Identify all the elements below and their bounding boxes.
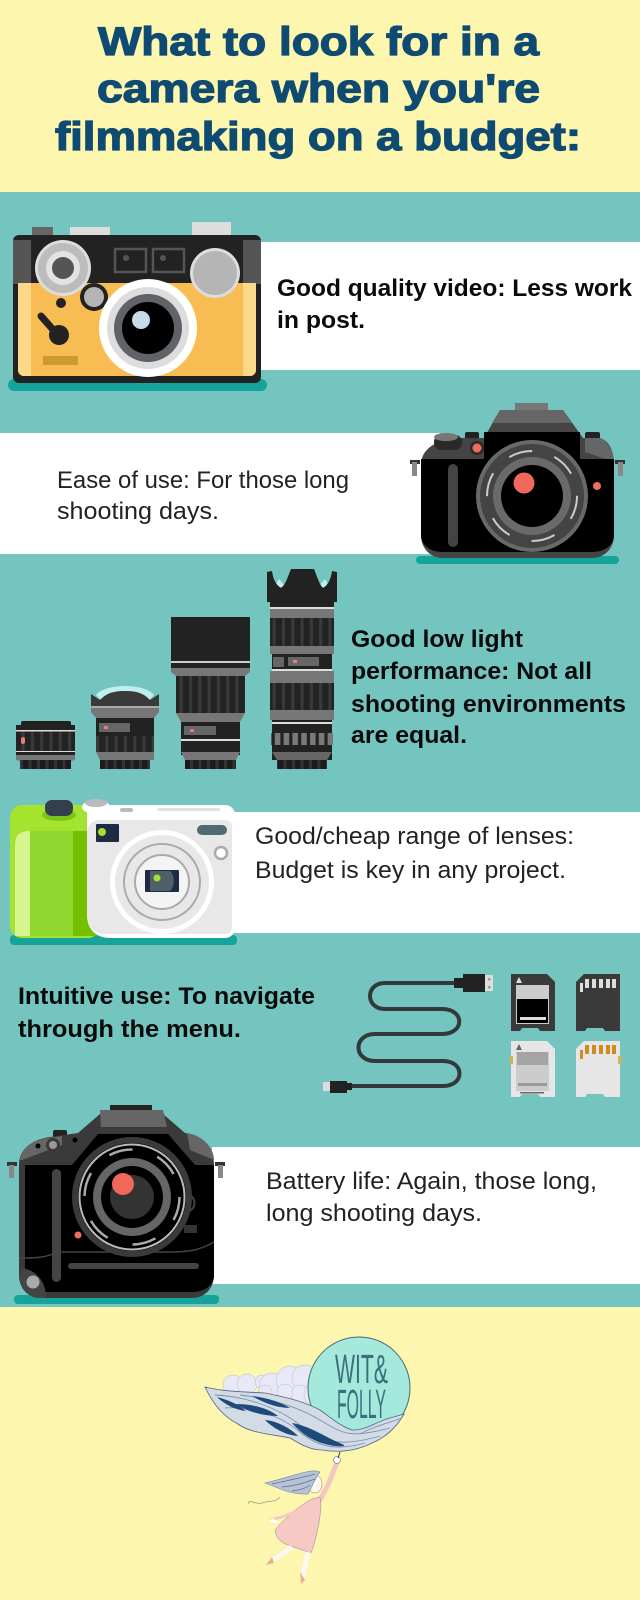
logo: wit and folly xyxy=(205,1337,410,1584)
icon: telephoto zoom lens xyxy=(267,569,337,769)
band: battery life xyxy=(212,1147,640,1284)
text: battery life: long shooting days. xyxy=(266,1200,482,1227)
logo circle with name xyxy=(308,1337,410,1439)
text: ease of use: Ease of use: For those long xyxy=(57,467,349,494)
icon: white and green compact camera xyxy=(10,799,237,945)
text: ease of use xyxy=(57,467,349,525)
text: intuitive use xyxy=(18,983,315,1043)
text: good low light performance xyxy=(351,626,626,749)
logo girl figure xyxy=(248,1452,340,1584)
text: battery life: Battery life: Again, those long, xyxy=(266,1168,597,1195)
text: range of lenses: Good/cheap range of lenses: xyxy=(255,823,574,850)
icon: USB cable xyxy=(323,974,493,1093)
band: range of lenses xyxy=(230,812,640,933)
text: ease of use: shooting days. xyxy=(57,498,219,525)
logo circle with name: WIT& xyxy=(335,1346,388,1392)
icon: hooded lens xyxy=(171,617,250,769)
text: good low light performance: are equal. xyxy=(351,722,467,749)
text: intuitive use: through the menu. xyxy=(18,1016,241,1043)
text: good quality video: Good quality video: Less work xyxy=(277,275,633,302)
logo clouds xyxy=(223,1365,332,1408)
text: battery life xyxy=(266,1168,597,1227)
icon: black DSLR camera xyxy=(410,403,625,564)
text: range of lenses xyxy=(255,823,574,884)
icon: lens set xyxy=(16,569,337,769)
text: range of lenses: Budget is key in any project. xyxy=(255,857,566,884)
text: good low light performance: shooting environments xyxy=(351,691,626,718)
icon: wide angle lens xyxy=(91,686,159,769)
band: ease of use xyxy=(0,433,440,554)
icon: short prime lens xyxy=(16,721,75,769)
text: good low light performance: performance: Not all xyxy=(351,658,592,685)
icon: dark SD card front xyxy=(511,974,555,1031)
title xyxy=(55,20,581,159)
teal panel xyxy=(0,192,640,1307)
logo circle with name: FOLLY xyxy=(337,1381,386,1427)
icon: white SD card back xyxy=(576,1041,621,1097)
icon: pro DSLR camera with battery grip xyxy=(7,1105,225,1304)
icon: yellow rangefinder camera xyxy=(8,222,267,391)
text: good quality video: in post. xyxy=(277,307,365,334)
icon: white SD card front xyxy=(510,1041,555,1097)
title: What to look for in a xyxy=(98,20,540,64)
text: good low light performance: Good low light xyxy=(351,626,523,653)
title: filmmaking on a budget: xyxy=(55,115,581,159)
text: intuitive use: Intuitive use: To navigate xyxy=(18,983,315,1010)
title: camera when you're xyxy=(97,67,540,111)
icon: dark SD card back xyxy=(576,974,620,1031)
logo waves xyxy=(205,1387,404,1451)
text: good quality video xyxy=(277,275,633,334)
band: good quality video xyxy=(258,242,640,370)
